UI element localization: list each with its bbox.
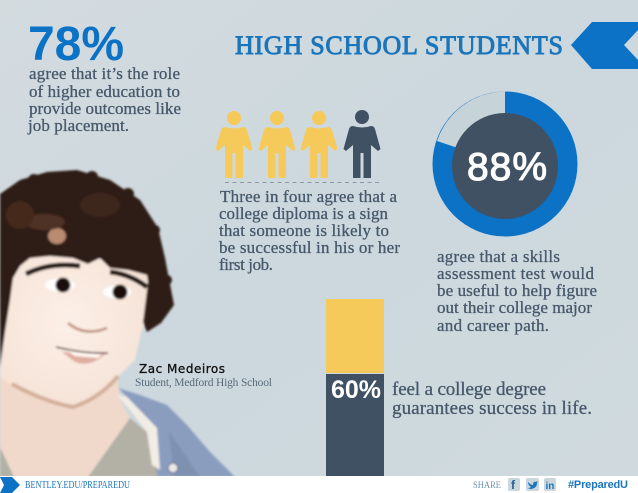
stat: 78% — [27, 18, 181, 135]
text: skills assessment: be useful to help figure — [437, 281, 597, 300]
pictogram: three of four people — [216, 110, 380, 178]
hoodie — [118, 388, 235, 477]
icon: person dark — [344, 110, 380, 178]
78% description: provide outcomes like — [29, 99, 181, 118]
icon: linkedin: in — [546, 481, 554, 492]
text: skills assessment: and career path. — [437, 316, 549, 335]
chin shadow — [12, 376, 118, 407]
ring blue — [432, 92, 578, 236]
text: three in four: that someone is likely to — [219, 221, 389, 240]
donut centre — [452, 113, 558, 219]
hashtag: #PreparedU — [568, 479, 628, 491]
text: skills assessment — [437, 247, 597, 335]
nose shadow — [68, 323, 107, 332]
hair highlights — [48, 228, 66, 244]
icon: person yellow 1 — [216, 111, 252, 178]
78% description: job placement. — [27, 116, 129, 135]
text: three in four: college diploma is a sign — [219, 204, 388, 223]
icon: blue chevron arrow — [571, 22, 638, 69]
78% description: of higher education to — [29, 82, 180, 101]
hood drawstring — [168, 463, 178, 473]
share label: SHARE — [473, 480, 501, 490]
text: three in four: first job. — [219, 255, 273, 274]
text: three in four — [219, 187, 400, 274]
hair — [0, 170, 174, 368]
text: skills assessment: assessment test would — [437, 264, 594, 283]
60% label: 60% — [331, 376, 381, 404]
eyebrows — [26, 265, 80, 274]
footer — [0, 476, 638, 493]
hoodie shadow — [170, 434, 198, 476]
photo: student portrait — [0, 170, 235, 477]
footer url: BENTLEY.EDU/PREPAREDU — [25, 480, 131, 491]
78% description: agree that it’s the role — [29, 64, 180, 83]
bar remainder — [326, 299, 384, 373]
icon: person yellow 3 — [300, 111, 338, 178]
mouth line — [56, 347, 108, 353]
ring remainder — [437, 92, 505, 164]
donut chart: 88% — [432, 92, 578, 236]
chest and neck — [0, 370, 130, 477]
text: college degree: feel a college degree — [392, 379, 546, 400]
eyes — [45, 278, 75, 292]
hood collar — [117, 395, 160, 470]
text: three in four: Three in four agree that a — [220, 187, 397, 206]
88% label: 88% — [467, 146, 547, 189]
icon: footer arrow — [0, 477, 20, 493]
bar chart: 60% — [326, 299, 384, 476]
text: college degree: guarantees success in life. — [392, 398, 592, 419]
heading: HIGH SCHOOL STUDENTS — [235, 31, 563, 60]
text: three in four: be successful in his or her — [219, 238, 400, 257]
text: skills assessment: agree that a skills — [437, 247, 560, 266]
face — [0, 250, 150, 407]
78% description — [27, 64, 181, 135]
caption: student school: Student, Medford High School — [135, 377, 272, 389]
text: skills assessment: out their college major — [437, 298, 592, 317]
icon: twitter — [526, 478, 539, 491]
icon: facebook: f — [511, 478, 516, 492]
icon: facebook — [508, 478, 520, 492]
text: college degree — [392, 379, 592, 419]
bar value — [326, 374, 384, 476]
t-shirt — [88, 418, 158, 477]
icon: linkedin — [544, 478, 556, 492]
icon: person yellow 2 — [258, 111, 296, 178]
lips — [62, 352, 105, 364]
teeth — [66, 350, 102, 358]
caption: student name: Zac Medeiros — [139, 362, 225, 376]
78% number: 78% — [28, 18, 124, 71]
